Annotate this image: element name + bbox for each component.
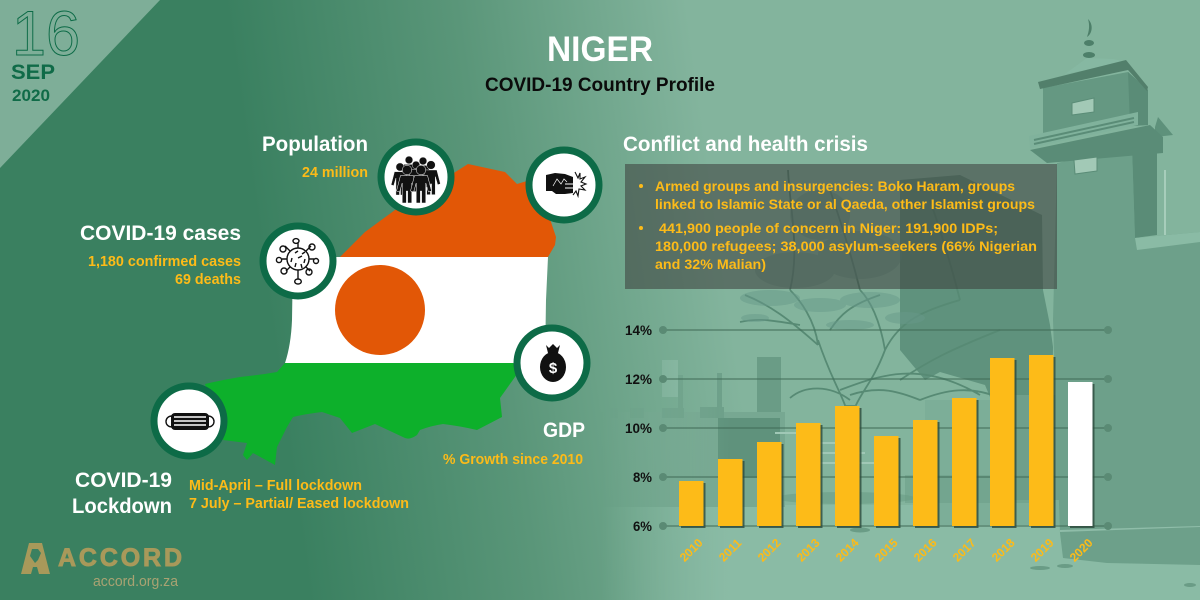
- year labels: 2010: [677, 536, 706, 565]
- year labels: 2017: [950, 536, 979, 565]
- covid-19 cases label: 69 deaths: [175, 272, 241, 288]
- population label: 24 million: [302, 165, 368, 181]
- mosque wall and minaret shaft: [1053, 147, 1200, 565]
- year labels: 2014: [833, 536, 862, 565]
- covid-19 cases label: COVID-19 cases: [80, 222, 241, 245]
- y axis labels: 12%: [625, 372, 652, 387]
- icon: money bag: $: [549, 360, 558, 377]
- ground rubble: [775, 475, 1196, 587]
- year labels: 2013: [794, 536, 823, 565]
- panel: conflict text: and 32% Malian): [655, 256, 766, 272]
- icon: face mask: [154, 386, 224, 456]
- population label: Population: [262, 133, 368, 156]
- map of Niger in flag colours: [205, 164, 556, 465]
- lockdown dates: Mid-April – Full lockdown: [189, 478, 362, 494]
- subtitle: COVID-19 Country Profile: [485, 75, 715, 96]
- lockdown label: Lockdown: [72, 495, 172, 518]
- minaret upper: [1029, 19, 1200, 250]
- year labels: 2011: [716, 536, 745, 564]
- green band: [205, 363, 520, 465]
- y axis labels: 6%: [633, 519, 652, 534]
- gdp label: % Growth since 2010: [443, 452, 583, 468]
- icon: fist: [529, 150, 599, 220]
- covid-19 cases label: 1,180 confirmed cases: [88, 254, 241, 270]
- panel: conflict text: Armed groups and insurgencies: Boko Haram, groups: [655, 178, 1015, 194]
- bar chart: GDP growth: [625, 323, 1112, 565]
- bars: [679, 355, 1092, 526]
- year labels: 2020: [1067, 536, 1096, 565]
- population label: [262, 133, 368, 181]
- day: 16: [12, 0, 80, 69]
- background photo: mosque and tree: [636, 19, 1200, 600]
- white band: [285, 257, 548, 363]
- date: [11, 0, 80, 105]
- gridlines: [659, 326, 1112, 530]
- conflict heading: Conflict and health crisis: [623, 133, 868, 156]
- year labels: 2016: [911, 536, 940, 565]
- date corner triangle: [0, 0, 160, 168]
- panel: conflict text: 441,900 people of concern in Niger: 191,900 IDPs;: [659, 220, 998, 236]
- year labels: 2012: [755, 536, 784, 565]
- icon: virus: [263, 226, 333, 296]
- year labels: [677, 536, 1096, 565]
- year labels: 2019: [1028, 536, 1057, 565]
- bar shadows: [681, 357, 1094, 528]
- lockdown dates: [189, 478, 409, 512]
- lockdown dates: 7 July – Partial/ Eased lockdown: [189, 496, 409, 512]
- covid-19 cases label: [80, 222, 241, 288]
- gdp label: [443, 419, 585, 468]
- year labels: 2018: [989, 536, 1018, 565]
- y axis labels: [625, 323, 652, 534]
- orange band: [340, 164, 556, 257]
- title: NIGER: [547, 30, 653, 69]
- panel: conflict text: linked to Islamic State or al Qaeda, other Islamist groups: [655, 196, 1035, 212]
- sky gap by minaret pole: [1164, 170, 1166, 235]
- orange sun: [335, 265, 425, 355]
- accord logo: accord.org.za: [93, 574, 179, 590]
- year: 2020: [12, 87, 50, 105]
- lockdown label: [72, 469, 172, 518]
- steps: [775, 432, 880, 464]
- year labels: 2015: [872, 536, 901, 565]
- y axis labels: 8%: [633, 470, 652, 485]
- accord logo: ACCORD: [58, 544, 182, 572]
- icon: population: [381, 142, 451, 212]
- tree branches and canopy: [740, 170, 1000, 425]
- icon: money bag: [517, 328, 587, 398]
- panel: conflict text: 180,000 refugees; 38,000 asylum-seekers (66% Nigerian: [655, 238, 1037, 254]
- tree mass right: [900, 175, 1053, 398]
- panel: conflict text: [625, 164, 1057, 289]
- building: [500, 357, 785, 507]
- ground: [636, 507, 770, 600]
- accord logo: [21, 543, 182, 590]
- lockdown label: COVID-19: [75, 469, 172, 492]
- y axis labels: 10%: [625, 421, 652, 436]
- y axis labels: 14%: [625, 323, 652, 338]
- month: SEP: [11, 61, 55, 84]
- gdp label: GDP: [543, 419, 585, 442]
